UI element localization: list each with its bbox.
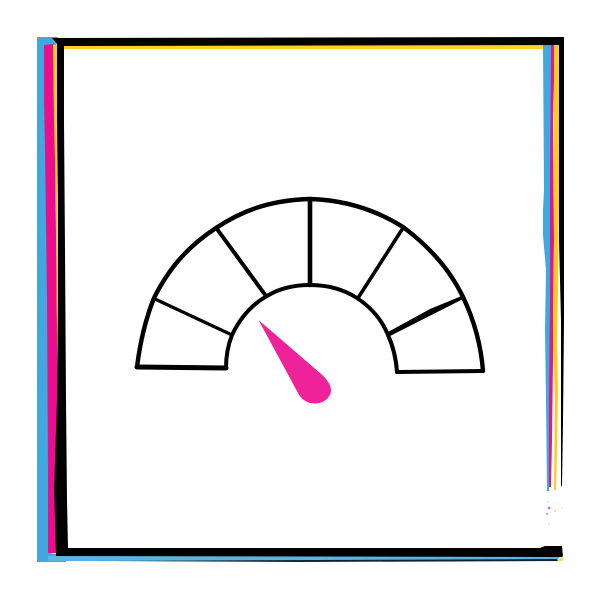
segment divider 4 xyxy=(358,228,403,298)
left magenta stripe xyxy=(44,44,58,553)
bottom right yellow corner xyxy=(557,556,563,561)
segment divider 1 xyxy=(155,299,232,335)
panel: printed frame xyxy=(37,37,564,562)
top yellow stripe xyxy=(63,45,545,49)
right yellow stripe xyxy=(553,44,559,490)
gauge outer arc xyxy=(137,199,483,371)
right black bar xyxy=(559,40,564,486)
right blue stripe xyxy=(543,44,552,491)
right magenta stripe xyxy=(549,44,555,487)
segment divider 2 xyxy=(217,229,266,296)
gauge baseline right xyxy=(397,371,483,372)
bottom blue stripe xyxy=(48,556,560,561)
left black bar xyxy=(54,42,68,556)
icon: magenta gauge needle xyxy=(258,320,331,404)
segment divider 5 xyxy=(388,295,465,336)
left blue stripe xyxy=(37,37,66,562)
faded ink specks xyxy=(546,501,563,525)
segment divider 3 xyxy=(308,199,312,285)
left yellow stripe xyxy=(53,44,60,340)
top black bar xyxy=(52,37,564,46)
gauge baseline left xyxy=(137,367,226,368)
gauge inner arc xyxy=(226,285,397,372)
bottom black bar xyxy=(56,546,563,557)
bottom dark sliver xyxy=(90,559,561,562)
chart: semicircular gauge dial xyxy=(137,199,483,372)
